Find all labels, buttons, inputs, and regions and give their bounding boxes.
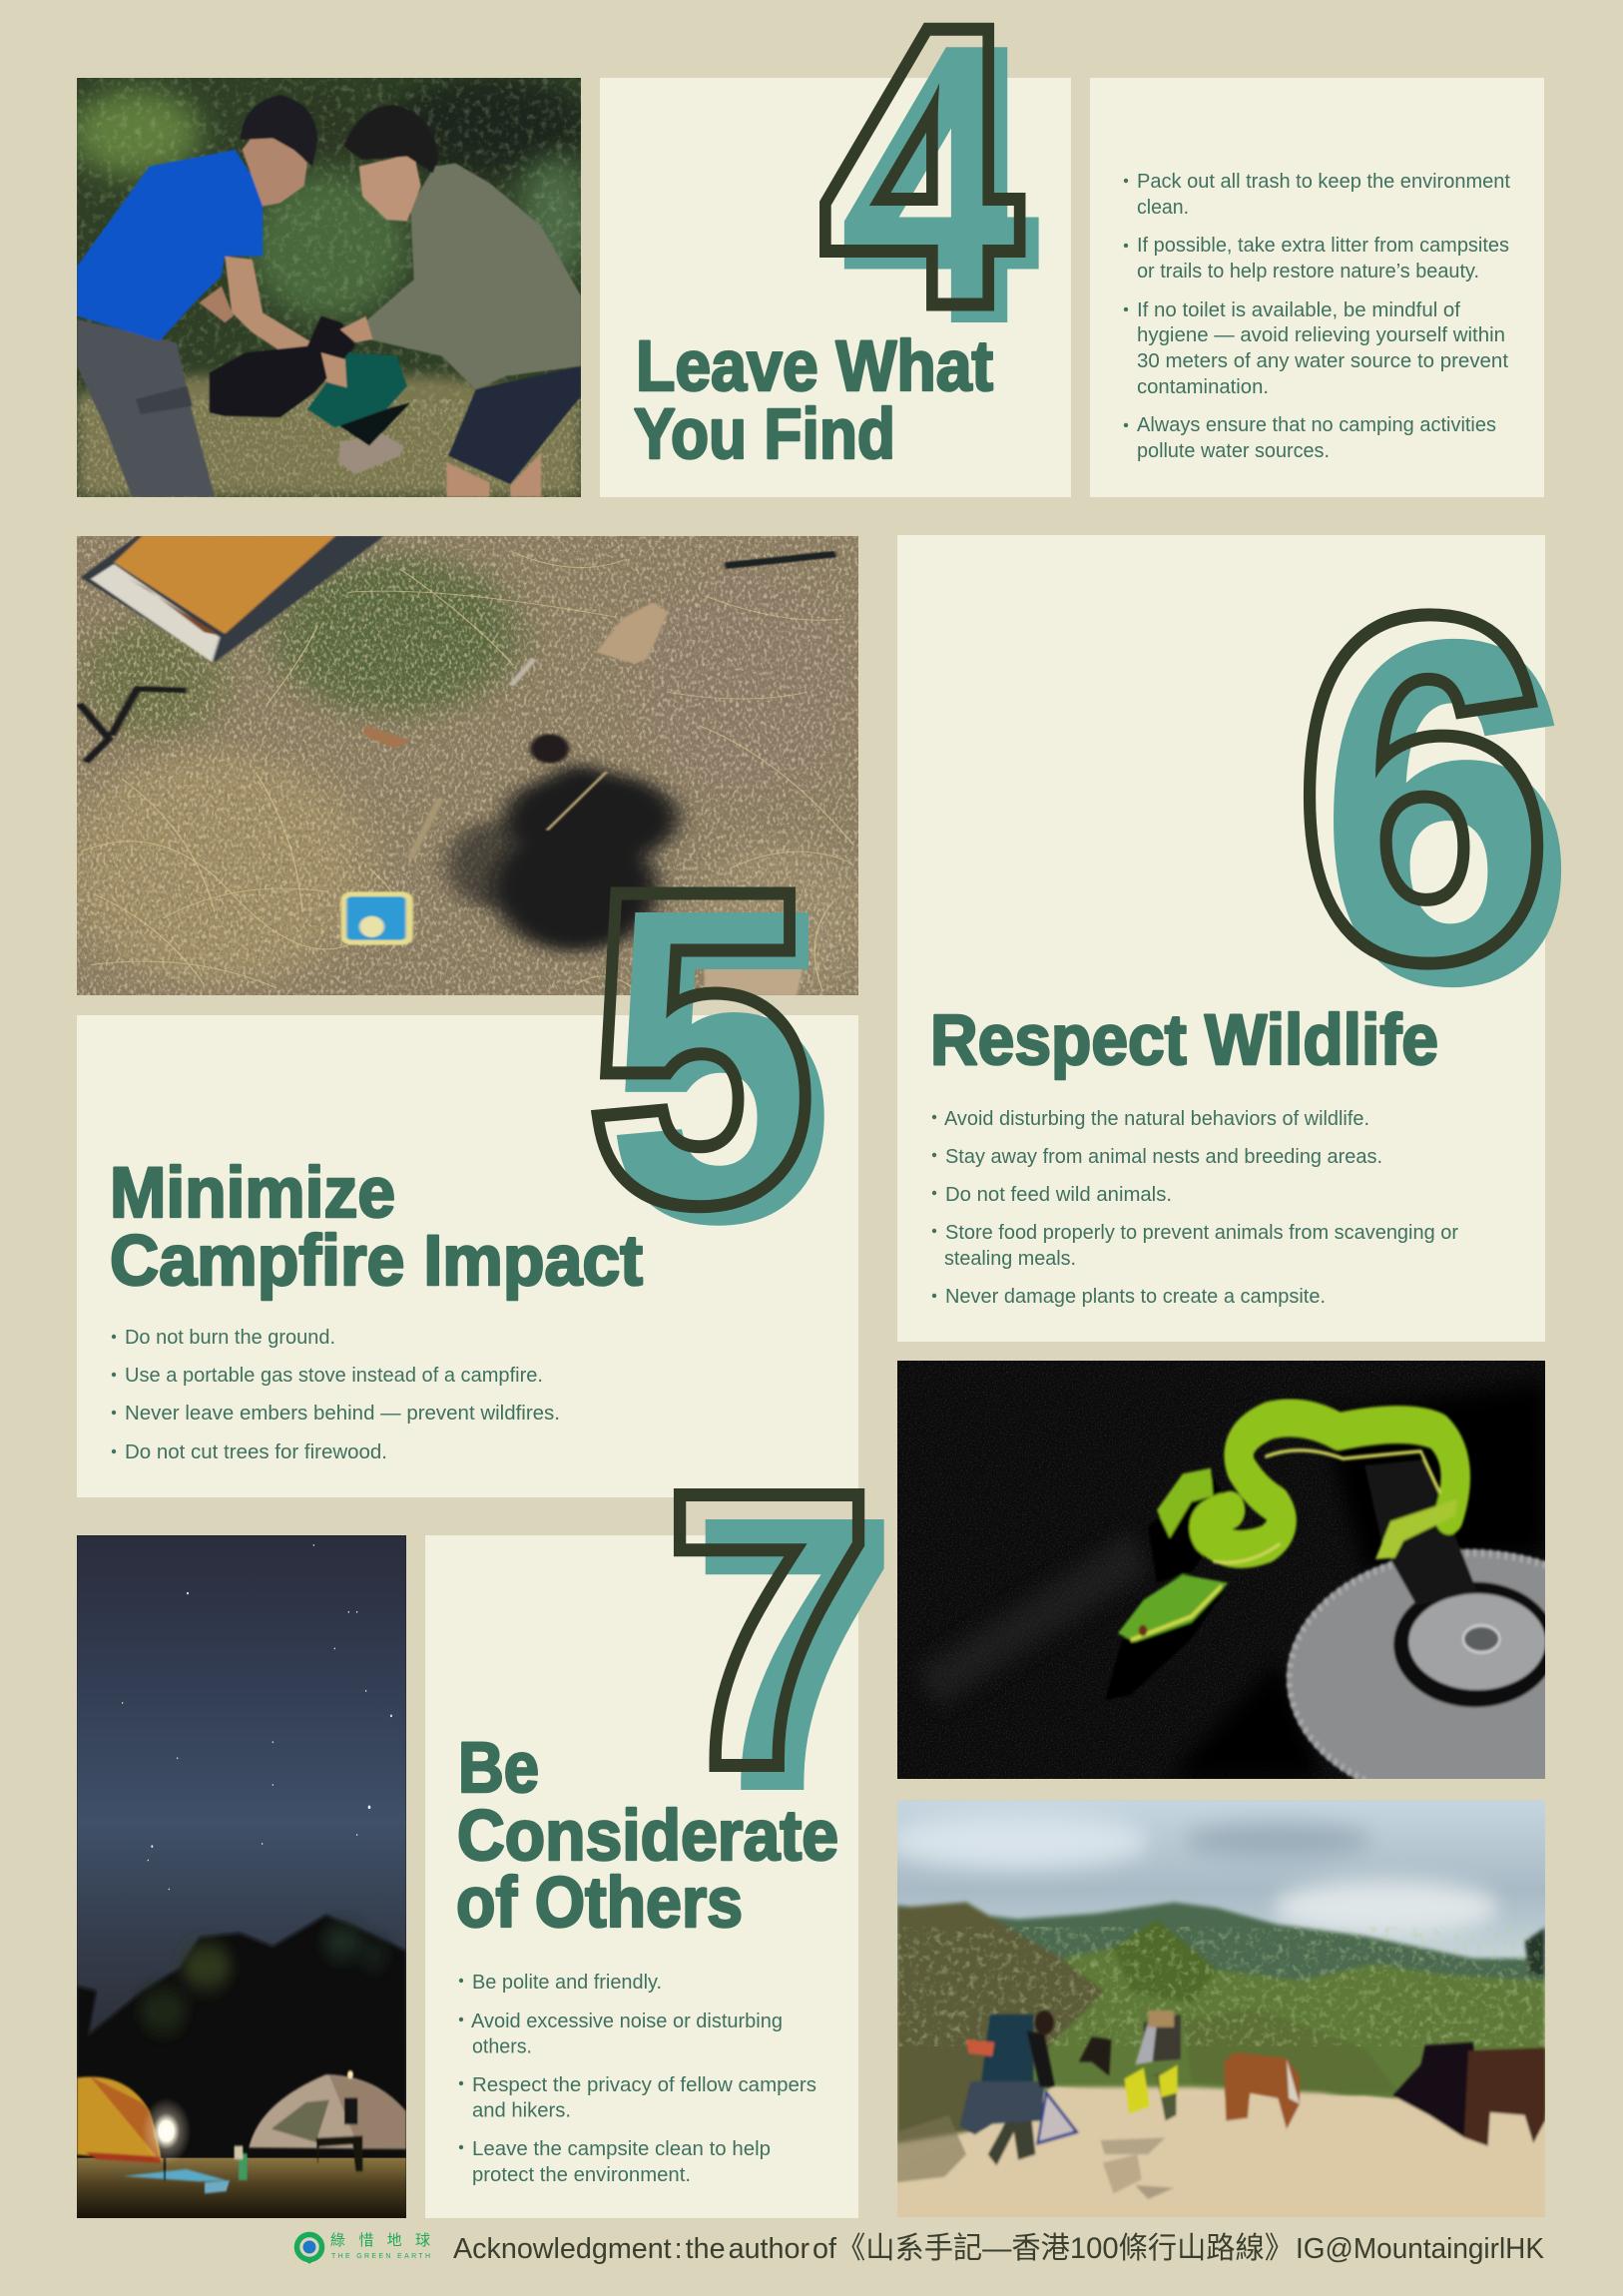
panel: leave what you find heading [600, 78, 1071, 497]
bullet list: rule 7: protect the environment. [472, 2164, 691, 2186]
bullet list: rule 5: Do not burn the ground. [125, 1327, 335, 1349]
bullet list: rule 4: pollute water sources. [1137, 440, 1330, 462]
bullet list: rule 5: Do not cut trees for firewood. [125, 1441, 387, 1463]
panel: be considerate of others [425, 1535, 858, 2218]
bullet list: rule 7: Respect the privacy of fellow campers [472, 2074, 816, 2096]
bullet list: rule 4: or trails to help restore nature’s beauty. [1137, 261, 1479, 283]
bullet list: rule 7: others. [472, 2036, 532, 2058]
bullet list: rule 4: If no toilet is available, be mindful of [1137, 299, 1460, 321]
bullet list: rule 6: Stay away from animal nests and breeding areas. [945, 1146, 1382, 1168]
heading: Be Considerate of Others: Be [458, 1729, 539, 1808]
acknowledgment [453, 2232, 1545, 2265]
heading: Minimize Campfire Impact [110, 1154, 643, 1301]
photo: burn mark and litter on grass [60, 536, 869, 995]
bullet list: rule 6: Store food properly to prevent animals from scavenging or [945, 1222, 1458, 1244]
bullet list: rule 4: 30 meters of any water source to prevent [1137, 350, 1508, 372]
photo: tents under the starry night sky [77, 1535, 406, 2218]
number 4 [819, 22, 1039, 322]
heading: Minimize Campfire Impact: Campfire Impact [110, 1222, 643, 1301]
photo: green pit viper on a bottle cap [897, 1361, 1545, 1779]
bullet list: rule 7 [459, 1972, 816, 2186]
bullet list: rule 4: Pack out all trash to keep the environment [1137, 171, 1510, 193]
number 5 [591, 886, 824, 1226]
logo: The Green Earth: THE GREEN EARTH [331, 2253, 430, 2260]
number 6 [1304, 608, 1561, 988]
photo: hikers carrying garbage past cattle [888, 1800, 1545, 2218]
acknowledgment: Acknowledgment : the author of [453, 2233, 837, 2265]
logo: The Green Earth [297, 2232, 430, 2264]
bullet list: rule 6: Do not feed wild animals. [945, 1184, 1172, 1206]
number 6: 6 [1324, 547, 1571, 1077]
bullet list: rule 4: contamination. [1137, 376, 1269, 398]
bullet list: rule 5: Never leave embers behind — prevent wildfires. [125, 1403, 560, 1425]
bullet list: rule 7: Leave the campsite clean to help [472, 2138, 771, 2160]
heading: Leave What You Find: You Find [634, 395, 895, 474]
panel: minimize campfire impact [77, 1015, 858, 1497]
logo: The Green Earth: 綠 惜 地 球 [330, 2232, 430, 2249]
bullet list: rule 4 [1124, 171, 1510, 462]
bullet list: rule 4: clean. [1137, 197, 1189, 219]
bullet list: rule 7: Be polite and friendly. [472, 1972, 662, 1994]
photo: two hikers collecting trash in bags [70, 77, 593, 497]
heading: Leave What You Find: Leave What [636, 327, 993, 406]
bullet list: rule 4: hygiene — avoid relieving yourself within [1137, 324, 1505, 346]
acknowledgment: 《山系手記—香港100條行山路線》 [836, 2232, 1294, 2265]
bullet list: rule 4: If possible, take extra litter from campsites [1137, 235, 1509, 257]
bullet list: rule 6: stealing meals. [944, 1248, 1076, 1270]
bullet list: rule 5 [112, 1327, 560, 1463]
bullet list: rule 6 [932, 1108, 1458, 1308]
bullet list: rule 5: Use a portable gas stove instead of a campfire. [125, 1365, 543, 1387]
heading: Be Considerate of Others: of Others [456, 1864, 743, 1943]
panel: leave what you find rules [1090, 78, 1544, 497]
bullet list: rule 6: Avoid disturbing the natural behaviors of wildlife. [944, 1108, 1369, 1130]
heading: Leave What You Find [634, 327, 993, 474]
number 5: 5 [612, 827, 829, 1307]
number 7 [673, 1488, 884, 1790]
heading: Be Considerate of Others: Considerate [457, 1797, 838, 1876]
bullet list: rule 7: Avoid excessive noise or disturbing [471, 2010, 783, 2032]
heading: Minimize Campfire Impact: Minimize [110, 1154, 395, 1233]
heading: Respect Wildlife: Respect Wildlife [930, 1001, 1438, 1080]
heading: Be Considerate of Others [456, 1729, 838, 1943]
number 7: 7 [697, 1445, 893, 1864]
bullet list: rule 4: Always ensure that no camping activities [1137, 414, 1496, 436]
bullet list: rule 7: and hikers. [472, 2100, 571, 2122]
acknowledgment: IG@MountaingirlHK [1296, 2233, 1545, 2265]
bullet list: rule 6: Never damage plants to create a campsite. [945, 1286, 1326, 1308]
panel: respect wildlife [897, 535, 1545, 1342]
